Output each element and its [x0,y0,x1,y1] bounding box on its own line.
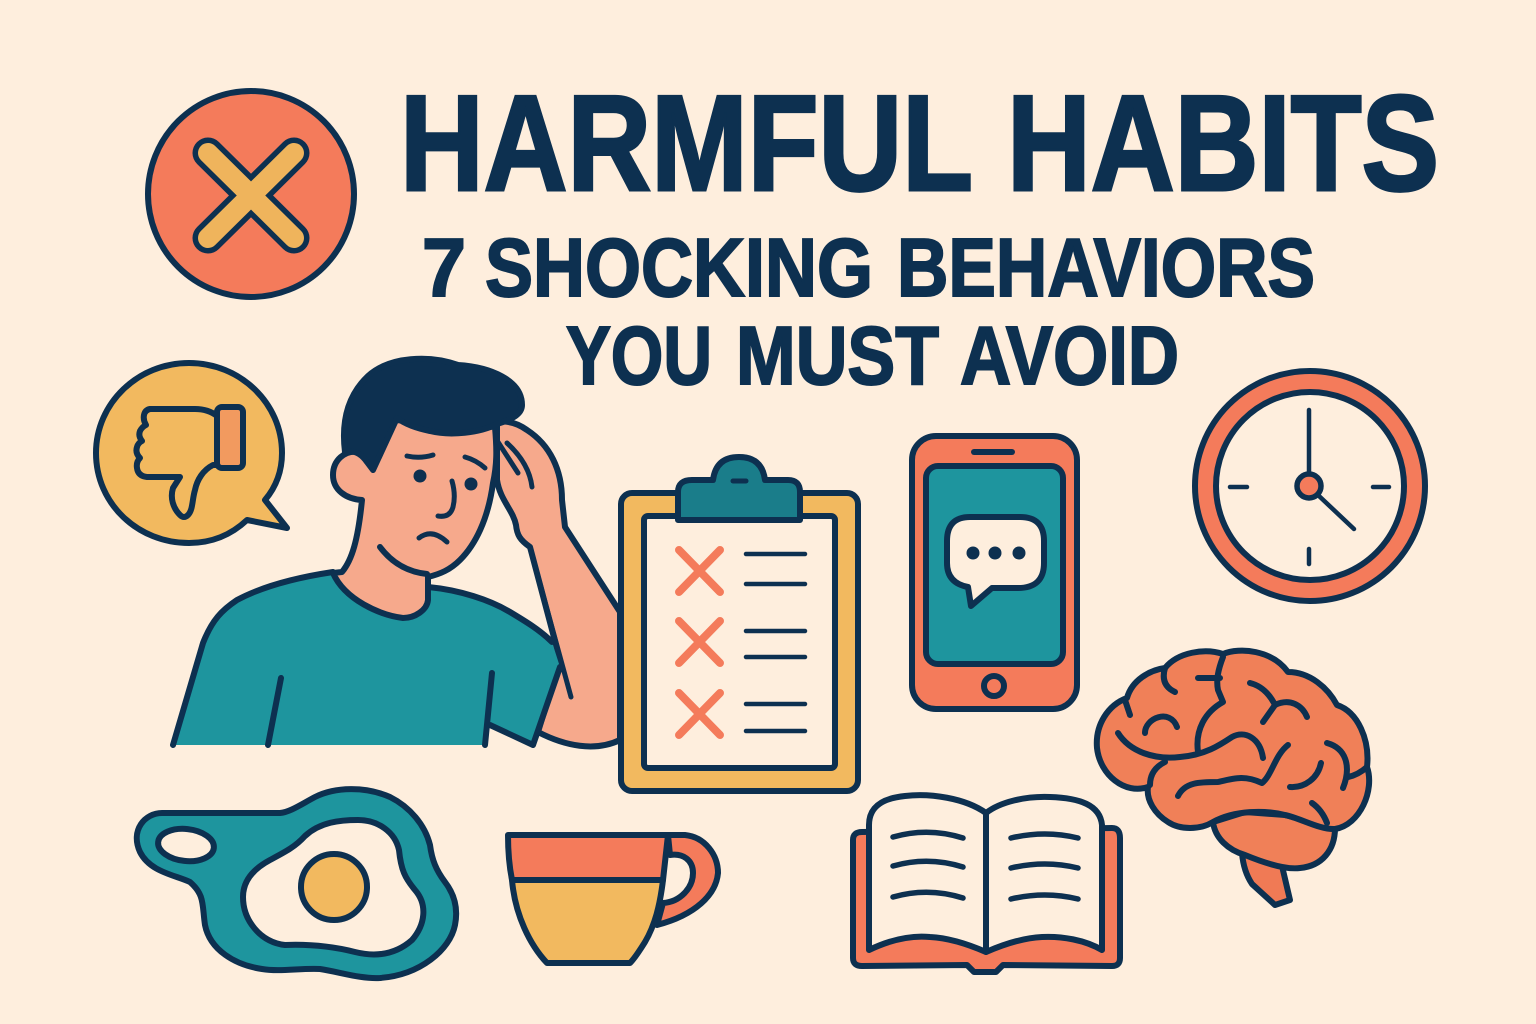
person [173,359,620,746]
subtitle [422,221,1315,402]
finger and arm lines [498,442,571,697]
icon: x in circle [148,91,354,297]
icon: fried egg on teal pan [137,789,456,978]
icon: open book [853,795,1120,972]
subtitle: YOU [566,309,712,402]
subtitle: 7 [422,221,466,314]
cerebrum outline [1097,651,1369,829]
icon: smartphone [912,436,1077,709]
neck and face [333,420,496,618]
icon: thumbs down speech bubble [96,363,287,543]
t-shirt [173,572,560,745]
icon: coffee cup [508,835,718,963]
cerebellum [1213,812,1335,868]
arm and hand [497,422,620,746]
subtitle: MUST [736,309,939,402]
icon: clock [1195,371,1425,601]
subtitle: SHOCKING [485,221,873,314]
subtitle: AVOID [960,309,1179,402]
title [400,67,1439,219]
icon: brain [1097,651,1369,905]
subtitle: BEHAVIORS [897,221,1315,314]
icon: clipboard [621,457,858,791]
title: HARMFUL [400,67,973,219]
face details [407,455,485,542]
brain folds [1118,657,1367,823]
hair [344,359,522,470]
brain stem [1242,853,1290,905]
title: HABITS [1007,67,1439,219]
